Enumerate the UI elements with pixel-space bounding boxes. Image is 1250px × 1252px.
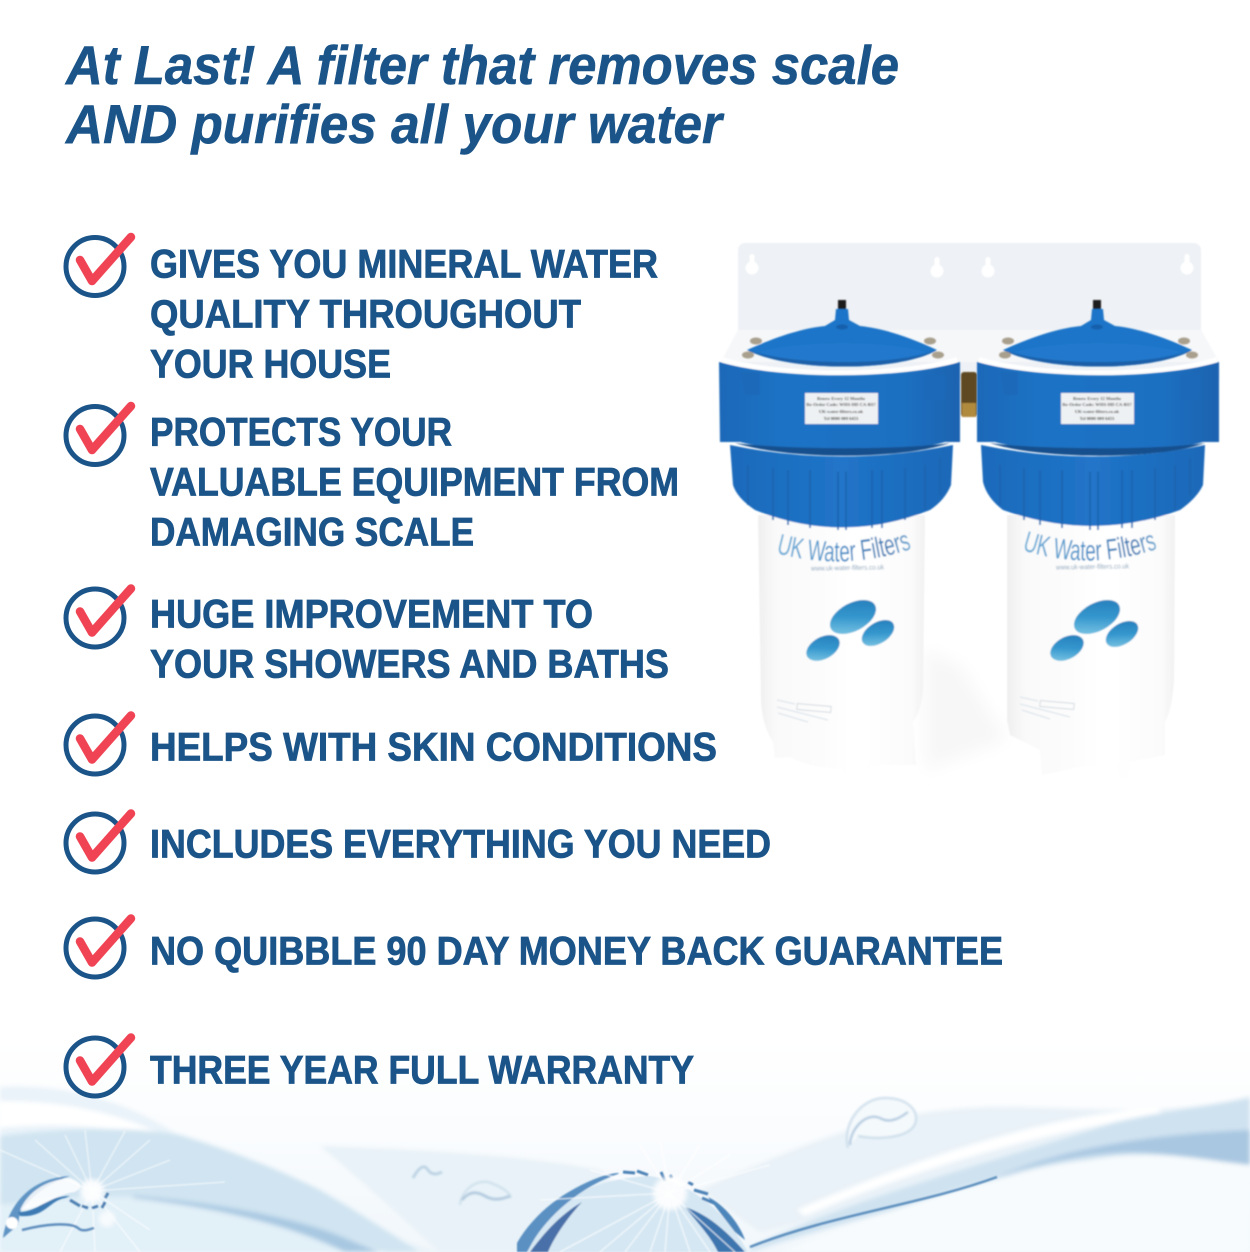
cartridge: [1007, 514, 1175, 738]
left filter: [718, 298, 962, 736]
icon: check mark: [66, 237, 131, 296]
cartridge: UK Water Filters: [1024, 530, 1157, 562]
benefit 4: HELPS WITH SKIN CONDITIONS: [150, 726, 717, 770]
benefit 3: [66, 588, 669, 686]
benefit 1: GIVES YOU MINERAL WATER: [150, 242, 658, 286]
housing: [719, 357, 960, 456]
label: Renew Every 12 Months: [817, 396, 865, 401]
label: Tel 0800 009 6453: [824, 416, 859, 421]
housing: [977, 357, 1219, 456]
ring nut: [981, 445, 1205, 530]
icon: check mark: [66, 1038, 131, 1096]
benefit 1: QUALITY THROUGHOUT: [150, 292, 581, 336]
benefit 7: [66, 1038, 694, 1096]
icon: check mark: [66, 918, 131, 977]
label: Renew Every 12 Months: [1073, 396, 1121, 401]
wall bracket: [721, 243, 1219, 380]
benefit 1: YOUR HOUSE: [150, 342, 391, 386]
benefit 2: [66, 406, 679, 554]
benefit 3: HUGE IMPROVEMENT TO: [150, 592, 593, 636]
benefit 2: PROTECTS YOUR: [150, 410, 452, 454]
title: [64, 34, 899, 155]
cartridge: www.uk-water-filters.co.uk: [810, 564, 885, 573]
bubble: large centre: [517, 1140, 770, 1252]
icon: water drops: [1046, 593, 1143, 666]
benefit 6: NO QUIBBLE 90 DAY MONEY BACK GUARANTEE: [150, 930, 1003, 974]
title: AND purifies all your water: [64, 93, 724, 155]
cartridge: www.uk-water-filters.co.uk: [1055, 563, 1130, 572]
benefit 2: VALUABLE EQUIPMENT FROM: [150, 460, 679, 504]
label: Tel 0800 009 6453: [1080, 416, 1115, 421]
label: UK-water-filters.co.uk: [819, 409, 864, 414]
icon: check mark: [66, 814, 131, 872]
label: UK-water-filters.co.uk: [1075, 409, 1120, 414]
icon: check mark: [66, 716, 131, 774]
benefit 1: [66, 237, 658, 386]
label: Re-Order Code: WHS-HD CA-BS7: [1062, 402, 1132, 407]
floor shadow: [925, 650, 1007, 770]
icon: water drops: [802, 593, 899, 666]
title: At Last! A filter that removes scale: [64, 34, 899, 96]
benefit 7: THREE YEAR FULL WARRANTY: [150, 1048, 694, 1092]
label: [805, 393, 878, 424]
benefit 4: [66, 716, 717, 774]
domed lid: [999, 300, 1198, 366]
brass connector: [961, 372, 977, 417]
label: Re-Order Code: WHS-HD CA-BS7: [806, 402, 876, 407]
benefit 5: INCLUDES EVERYTHING YOU NEED: [150, 822, 771, 866]
bubble: upper right: [847, 1098, 916, 1148]
benefit 2: DAMAGING SCALE: [150, 510, 474, 554]
cartridge: [758, 514, 924, 736]
benefit 6: [66, 918, 1003, 977]
benefit 3: YOUR SHOWERS AND BATHS: [150, 642, 669, 686]
benefit 5: [66, 814, 771, 872]
ring nut: [730, 445, 953, 530]
label: [1061, 393, 1134, 424]
icon: check mark: [66, 588, 131, 647]
domed lid: [742, 300, 944, 366]
product photo: twin water filter unit: [718, 243, 1220, 738]
bubble: lower left: [0, 1130, 225, 1252]
right filter: [976, 298, 1220, 738]
cartridge: UK Water Filters: [778, 534, 912, 563]
water wave background: [0, 1040, 1250, 1252]
icon: check mark: [66, 406, 131, 464]
small bubbles: [413, 1167, 511, 1205]
